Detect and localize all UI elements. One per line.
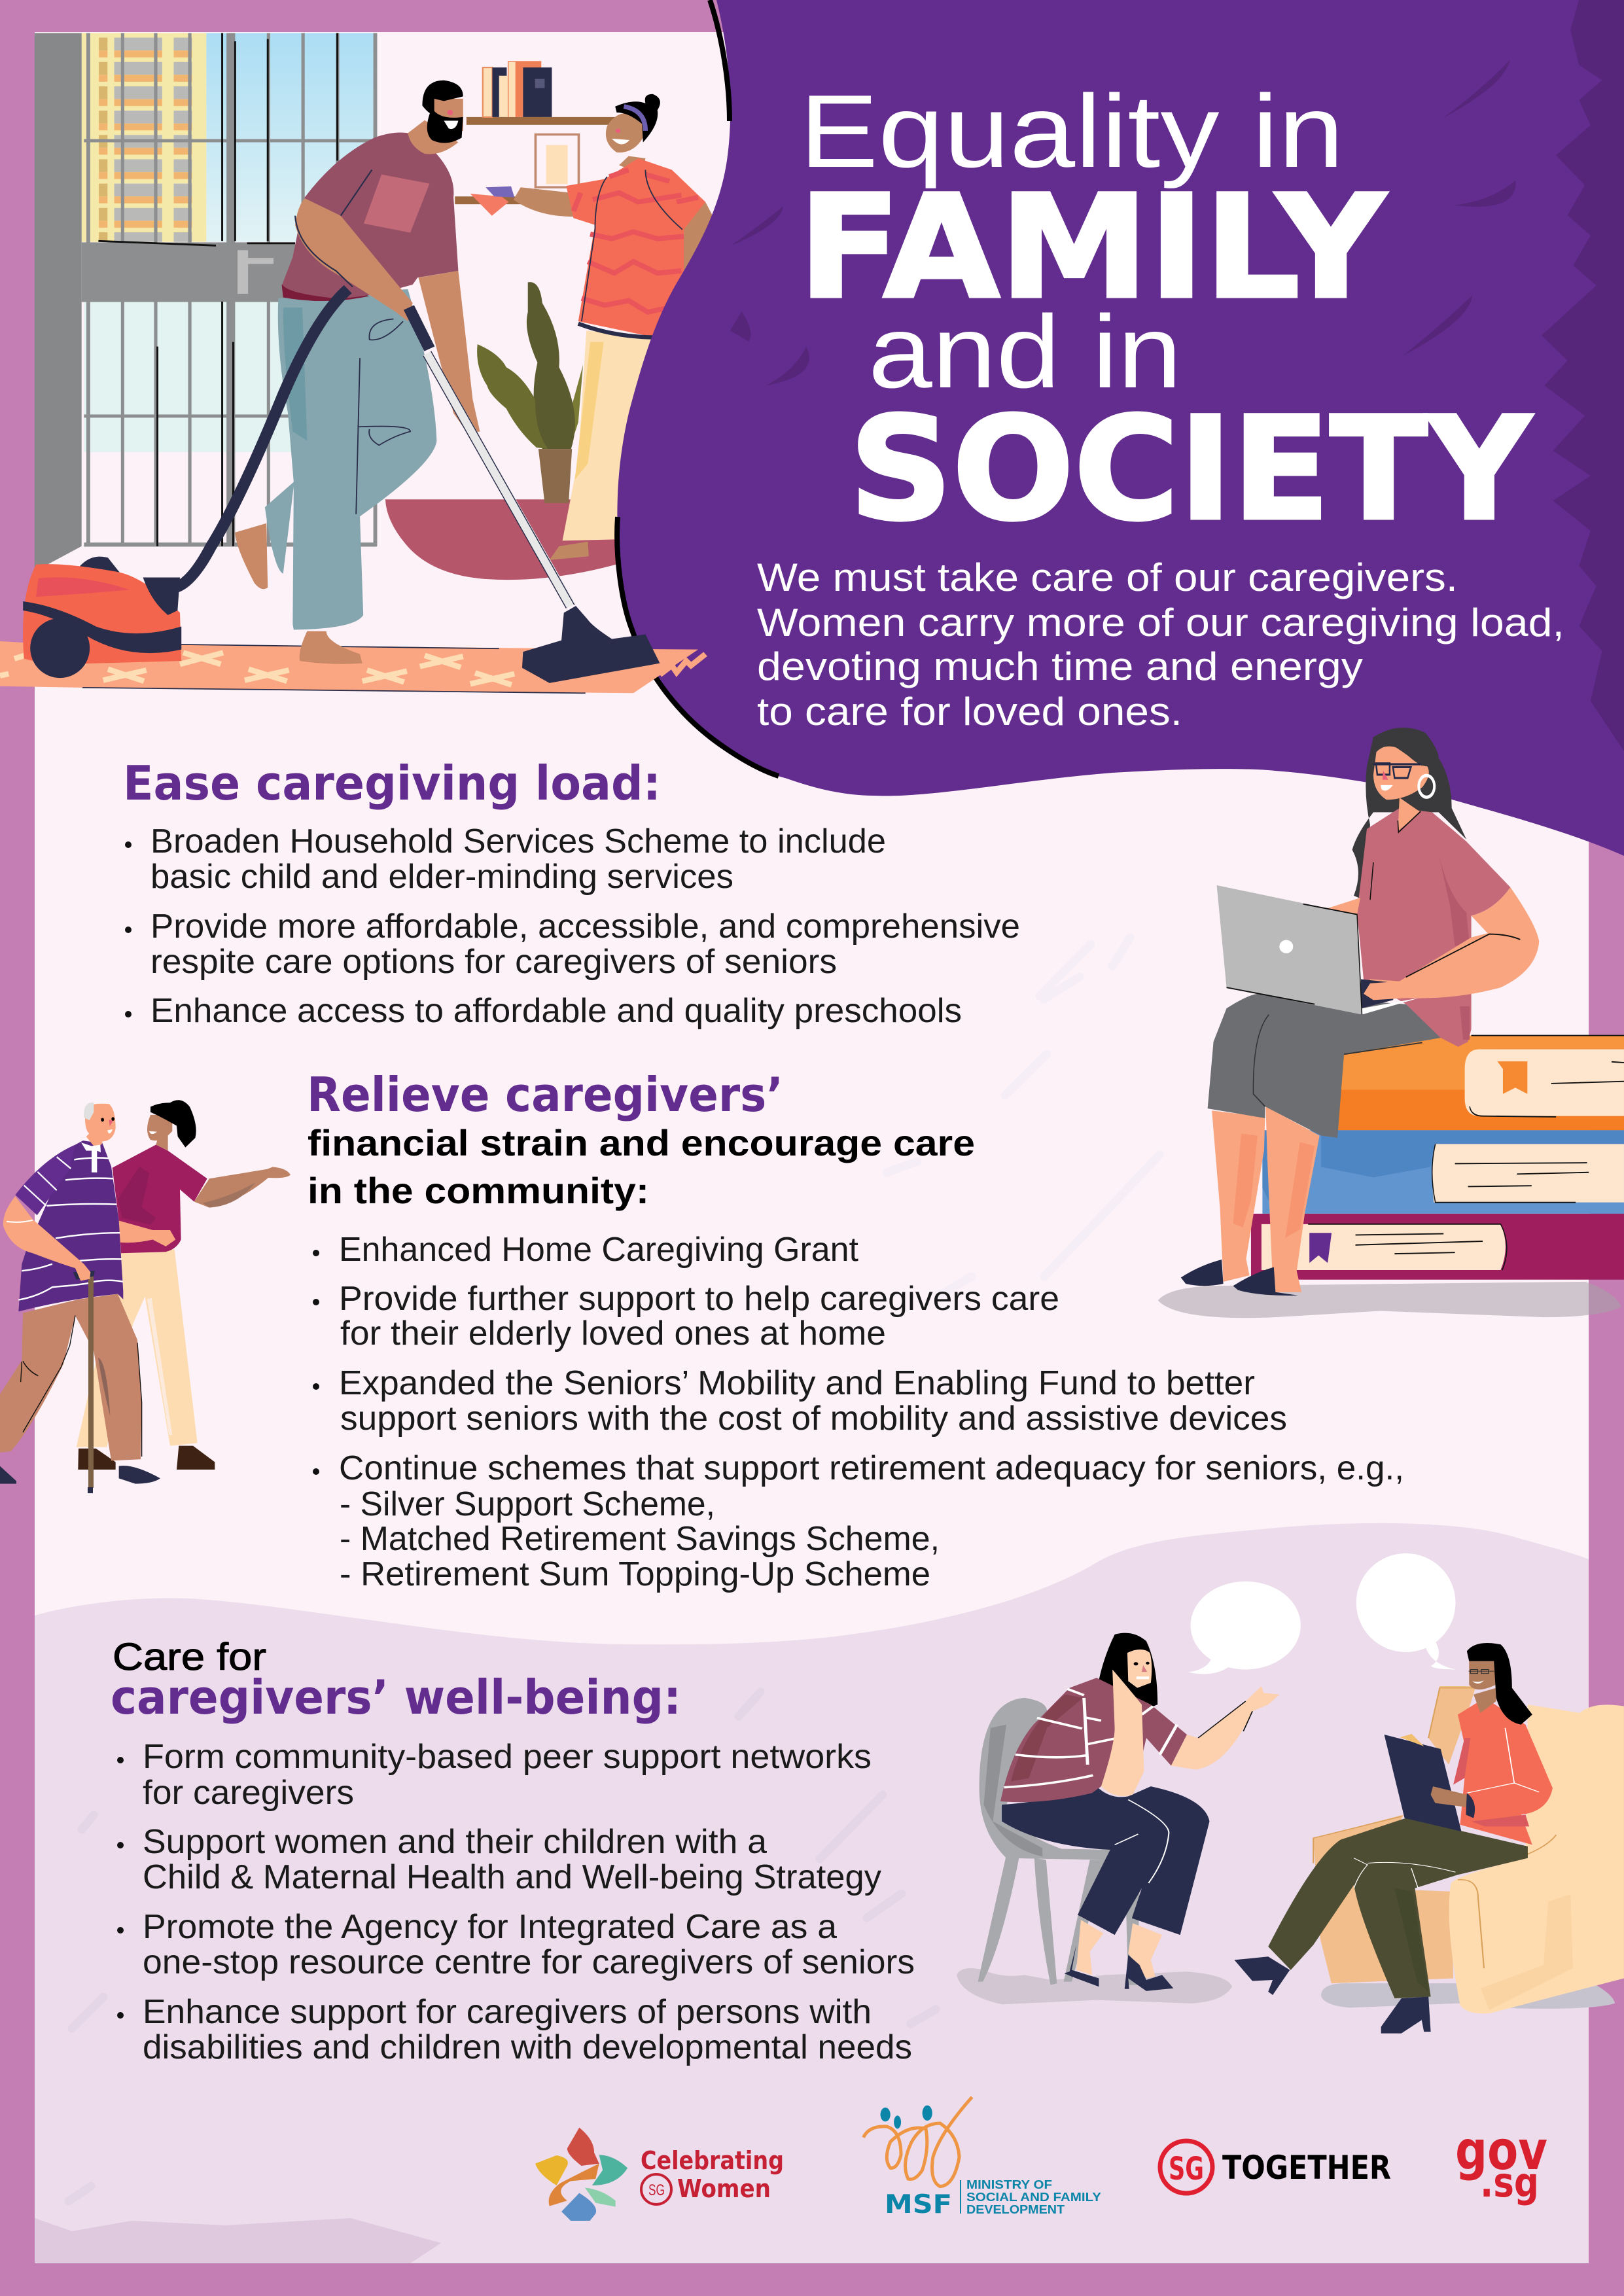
logo: SG Together: SG (1169, 2151, 1204, 2187)
floor rug (0, 641, 705, 693)
list: relieve caregivers: - Retirement Sum Topping-Up Scheme (340, 1555, 930, 1593)
logo: gov.sg (1455, 2120, 1547, 2206)
list: caregivers well-being: Child & Maternal Health and Well-being Strategy (143, 1858, 881, 1896)
list: ease caregiving load: Provide more affordable, accessible, and comprehensive (150, 908, 1020, 945)
purple dark brush texture (730, 0, 1624, 751)
logo: MSF: MSF (885, 2190, 952, 2219)
logo: MSF: MINISTRY OF (966, 2178, 1052, 2191)
list: relieve caregivers: Provide further support to help caregivers care (339, 1280, 1059, 1318)
logo: MSF: SOCIAL AND FAMILY (966, 2191, 1101, 2204)
woman with clipboard (1234, 1643, 1553, 2034)
list: caregivers well-being: for caregivers (143, 1774, 354, 1812)
list: caregivers well-being (117, 1738, 915, 2066)
title line: and in: and in (868, 294, 1182, 410)
intro paragraph: to care for loved ones. (757, 690, 1182, 733)
plant (477, 282, 583, 503)
heading: Relieve caregivers: in the community: (308, 1170, 649, 1211)
list: ease caregiving load: Enhance access to affordable and quality preschools (150, 992, 962, 1030)
logo: Celebrating SG Women (535, 2128, 784, 2221)
floor shadows (957, 1968, 1615, 2009)
vacuum cleaner (23, 289, 660, 683)
woman on chair (1000, 1633, 1279, 1991)
concrete wall column (35, 33, 82, 571)
list: ease caregiving load (125, 822, 1020, 1030)
heading: Ease caregiving load: Ease caregiving load: (123, 756, 661, 811)
red round rug (385, 499, 624, 580)
illustration: window and room behind (35, 33, 713, 580)
list: ease caregiving load: Broaden Household Services Scheme to include (150, 822, 886, 860)
title line: Equality in: Equality in (800, 74, 1344, 189)
heading: Relieve caregivers: Relieve caregivers’ (307, 1067, 783, 1122)
armchair (1313, 1686, 1624, 2013)
woman on books (1181, 728, 1539, 1296)
list: caregivers well-being: Support women and their children with a (143, 1823, 767, 1861)
list: relieve caregivers: for their elderly loved ones at home (340, 1315, 886, 1352)
list: ease caregiving load: respite care options for caregivers of seniors (150, 943, 837, 981)
ground shadow (1158, 1282, 1621, 1318)
logo: SG Together: TOGETHER (1222, 2149, 1391, 2187)
list: relieve caregivers (313, 1231, 1404, 1593)
intro paragraph (757, 556, 1564, 733)
list: ease caregiving load: basic child and elder-minding services (150, 858, 733, 896)
book stack (1251, 1036, 1624, 1280)
list: caregivers well-being: disabilities and children with developmental needs (143, 2028, 912, 2066)
intro paragraph: Women carry more of our caregiving load, (757, 601, 1564, 645)
logo: SG Together (1160, 2141, 1391, 2193)
list: relieve caregivers: Continue schemes that support retirement adequacy for seniors, e.g., (339, 1449, 1404, 1487)
panel: lower lavender well-being section (35, 1523, 1589, 2263)
list: caregivers well-being: one-stop resource centre for caregivers of seniors (143, 1943, 915, 1981)
shelf with books (455, 61, 615, 204)
illustration: woman with laptop on books (1158, 728, 1624, 1318)
heading: Care for caregivers well-being (111, 1636, 681, 1725)
illustration: two women in conversation (957, 1553, 1624, 2034)
list: relieve caregivers: support seniors with the cost of mobility and assistive devices (340, 1400, 1287, 1438)
MSF mark (863, 2097, 972, 2187)
list: relieve caregivers: Expanded the Seniors’ Mobility and Enabling Fund to better (339, 1364, 1255, 1402)
title line: FAMILY: FAMILY (798, 166, 1387, 330)
list: relieve caregivers: - Silver Support Scheme, (340, 1485, 715, 1523)
logo: Celebrating SG Women: Celebrating (641, 2146, 784, 2175)
logo: gov.sg: .sg (1480, 2159, 1539, 2206)
list: caregivers well-being: Form community-based peer support networks (143, 1738, 872, 1776)
intro paragraph: We must take care of our caregivers. (757, 556, 1458, 599)
heading: Relieve caregivers: financial strain and encourage care (308, 1122, 975, 1163)
intro paragraph: devoting much time and energy (757, 645, 1363, 688)
illustration: floor rug, man vacuuming (0, 80, 705, 693)
list: relieve caregivers: Enhanced Home Caregiving Grant (339, 1231, 859, 1269)
logo: MSF: DEVELOPMENT (966, 2203, 1065, 2216)
speech bubble left (1188, 1581, 1301, 1674)
heading: Relieve caregivers (307, 1067, 975, 1211)
caregiver woman pointing (77, 1100, 291, 1470)
man vacuuming (235, 80, 480, 664)
logo: MSF (863, 2097, 1101, 2219)
window glass and building (82, 33, 377, 452)
chair (978, 1698, 1140, 1985)
senior man with cane (0, 1103, 160, 1493)
logo: gov.sg: gov (1455, 2120, 1547, 2182)
bottom left brush shape (35, 2218, 441, 2263)
illustration: senior man with caregiver (0, 1100, 291, 1493)
woman dusting (470, 94, 713, 560)
door grille (82, 33, 377, 546)
heading: Care for caregivers well-being: caregivers’ well-being: (111, 1670, 681, 1725)
list: caregivers well-being: Promote the Agency for Integrated Care as a (143, 1908, 837, 1946)
title (798, 74, 1533, 552)
speech bubble right (1356, 1553, 1456, 1670)
brush marks background (69, 938, 1159, 2201)
title line: SOCIETY: SOCIETY (849, 387, 1533, 552)
logo: Celebrating SG Women: SG (648, 2181, 665, 2199)
list: caregivers well-being: Enhance support for caregivers of persons with (143, 1993, 872, 2031)
flower mark (535, 2128, 627, 2221)
heading: Care for caregivers well-being: Care for (113, 1636, 266, 1678)
logo: Celebrating SG Women: Women (677, 2174, 771, 2203)
list: relieve caregivers: - Matched Retirement Savings Scheme, (340, 1520, 940, 1558)
title panel: purple wave (617, 0, 1624, 856)
